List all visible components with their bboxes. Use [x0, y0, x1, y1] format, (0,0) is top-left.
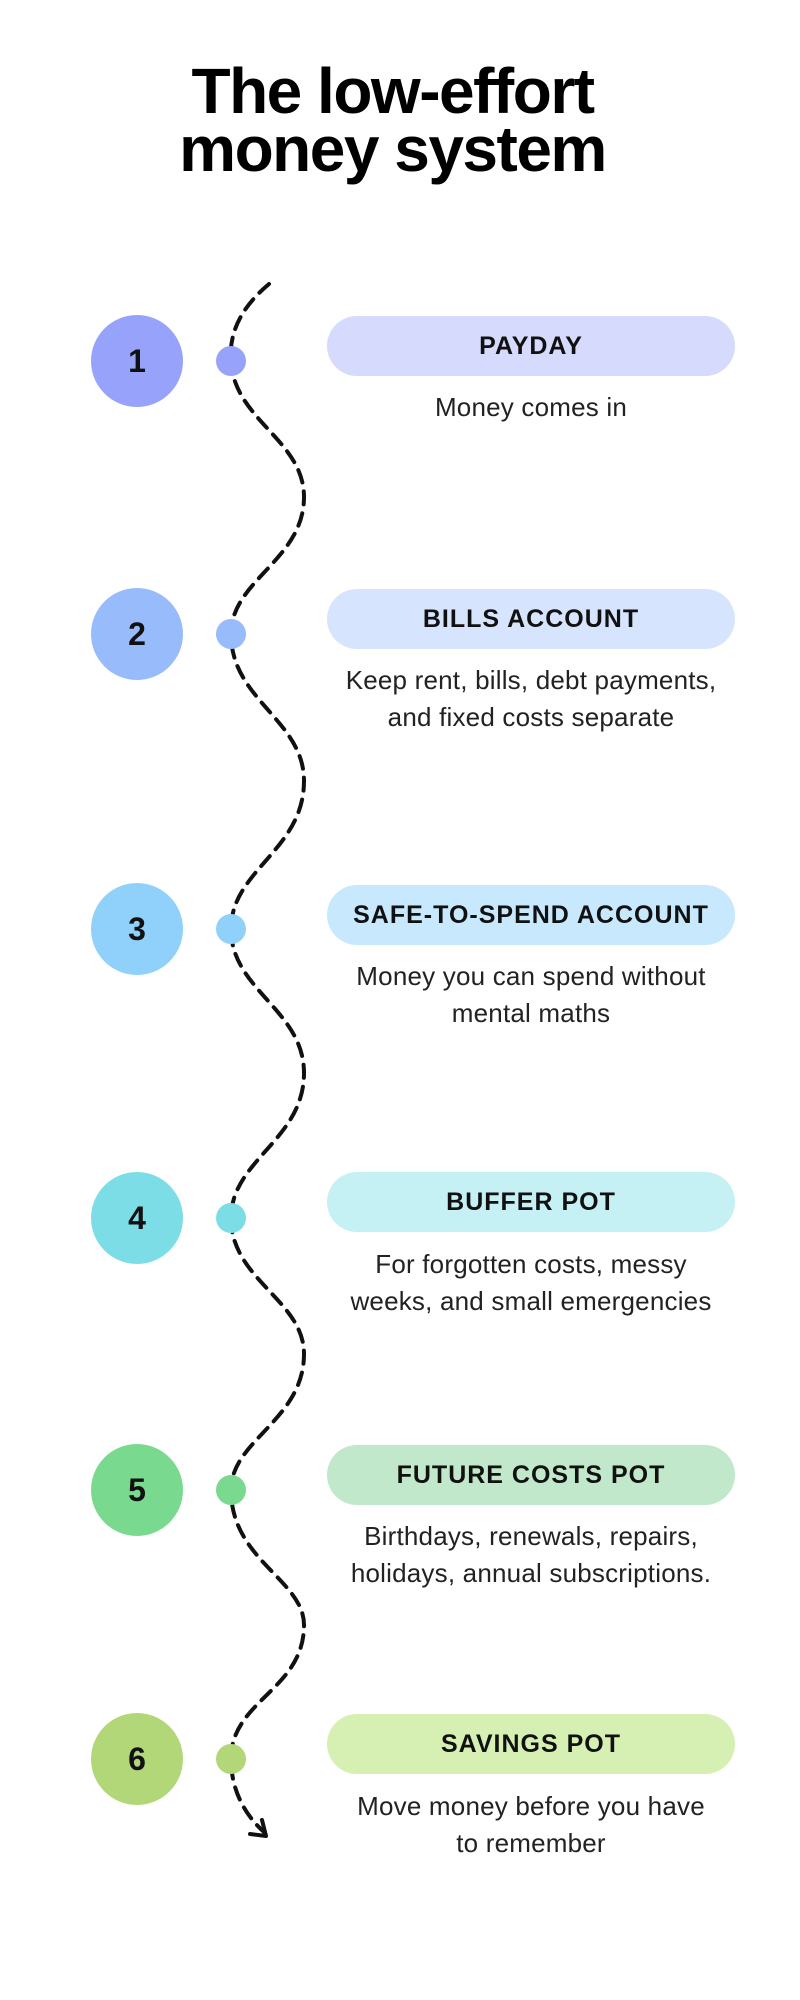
step 6 description: to remember	[456, 1828, 606, 1858]
step 3 description: mental maths	[452, 998, 610, 1028]
step 5 number: 5	[128, 1472, 146, 1508]
step 3 number: 3	[128, 911, 146, 947]
step 2 number	[91, 588, 183, 680]
step 6 number	[91, 1713, 183, 1805]
step 6 label: SAVINGS POT	[441, 1730, 621, 1758]
step 4 description	[350, 1249, 712, 1316]
step 6 description	[357, 1791, 705, 1858]
step 5 label: FUTURE COSTS POT	[397, 1461, 665, 1489]
step 4 label: BUFFER POT	[446, 1188, 616, 1216]
step 1 number: 1	[128, 343, 146, 379]
step 1 label: PAYDAY	[479, 332, 583, 360]
step 6 description: Move money before you have	[357, 1791, 705, 1821]
title: money system	[179, 113, 606, 185]
step 2 label	[327, 589, 735, 649]
step 4 number	[91, 1172, 183, 1264]
step 4 description: weeks, and small emergencies	[350, 1286, 712, 1316]
step 4 label	[327, 1172, 735, 1232]
step 6 number: 6	[128, 1741, 146, 1777]
step 4 description: For forgotten costs, messy	[375, 1249, 687, 1279]
step 5 description	[351, 1521, 711, 1588]
step 3 description: Money you can spend without	[356, 961, 706, 991]
step 2 description: and fixed costs separate	[388, 702, 674, 732]
step 5 description: Birthdays, renewals, repairs,	[364, 1521, 698, 1551]
step 5 number	[91, 1444, 183, 1536]
step 6 label	[327, 1714, 735, 1774]
step 3 label	[327, 885, 735, 945]
step 1 description: Money comes in	[435, 392, 627, 422]
step 4 number: 4	[128, 1200, 146, 1236]
step 3 label: SAFE-TO-SPEND ACCOUNT	[353, 901, 709, 929]
step 5 description: holidays, annual subscriptions.	[351, 1558, 711, 1588]
step 1 number	[91, 315, 183, 407]
title	[179, 55, 606, 185]
step 1 label	[327, 316, 735, 376]
step 5 label	[327, 1445, 735, 1505]
step 2 label: BILLS ACCOUNT	[423, 605, 639, 633]
title: The low-effort	[191, 55, 594, 127]
step 3 description	[356, 961, 706, 1028]
step 3 number	[91, 883, 183, 975]
arrow head	[250, 1820, 266, 1836]
timeline dots	[216, 346, 246, 1774]
step 2 number: 2	[128, 616, 146, 652]
step 2 description: Keep rent, bills, debt payments,	[346, 665, 716, 695]
step 2 description	[346, 665, 716, 732]
